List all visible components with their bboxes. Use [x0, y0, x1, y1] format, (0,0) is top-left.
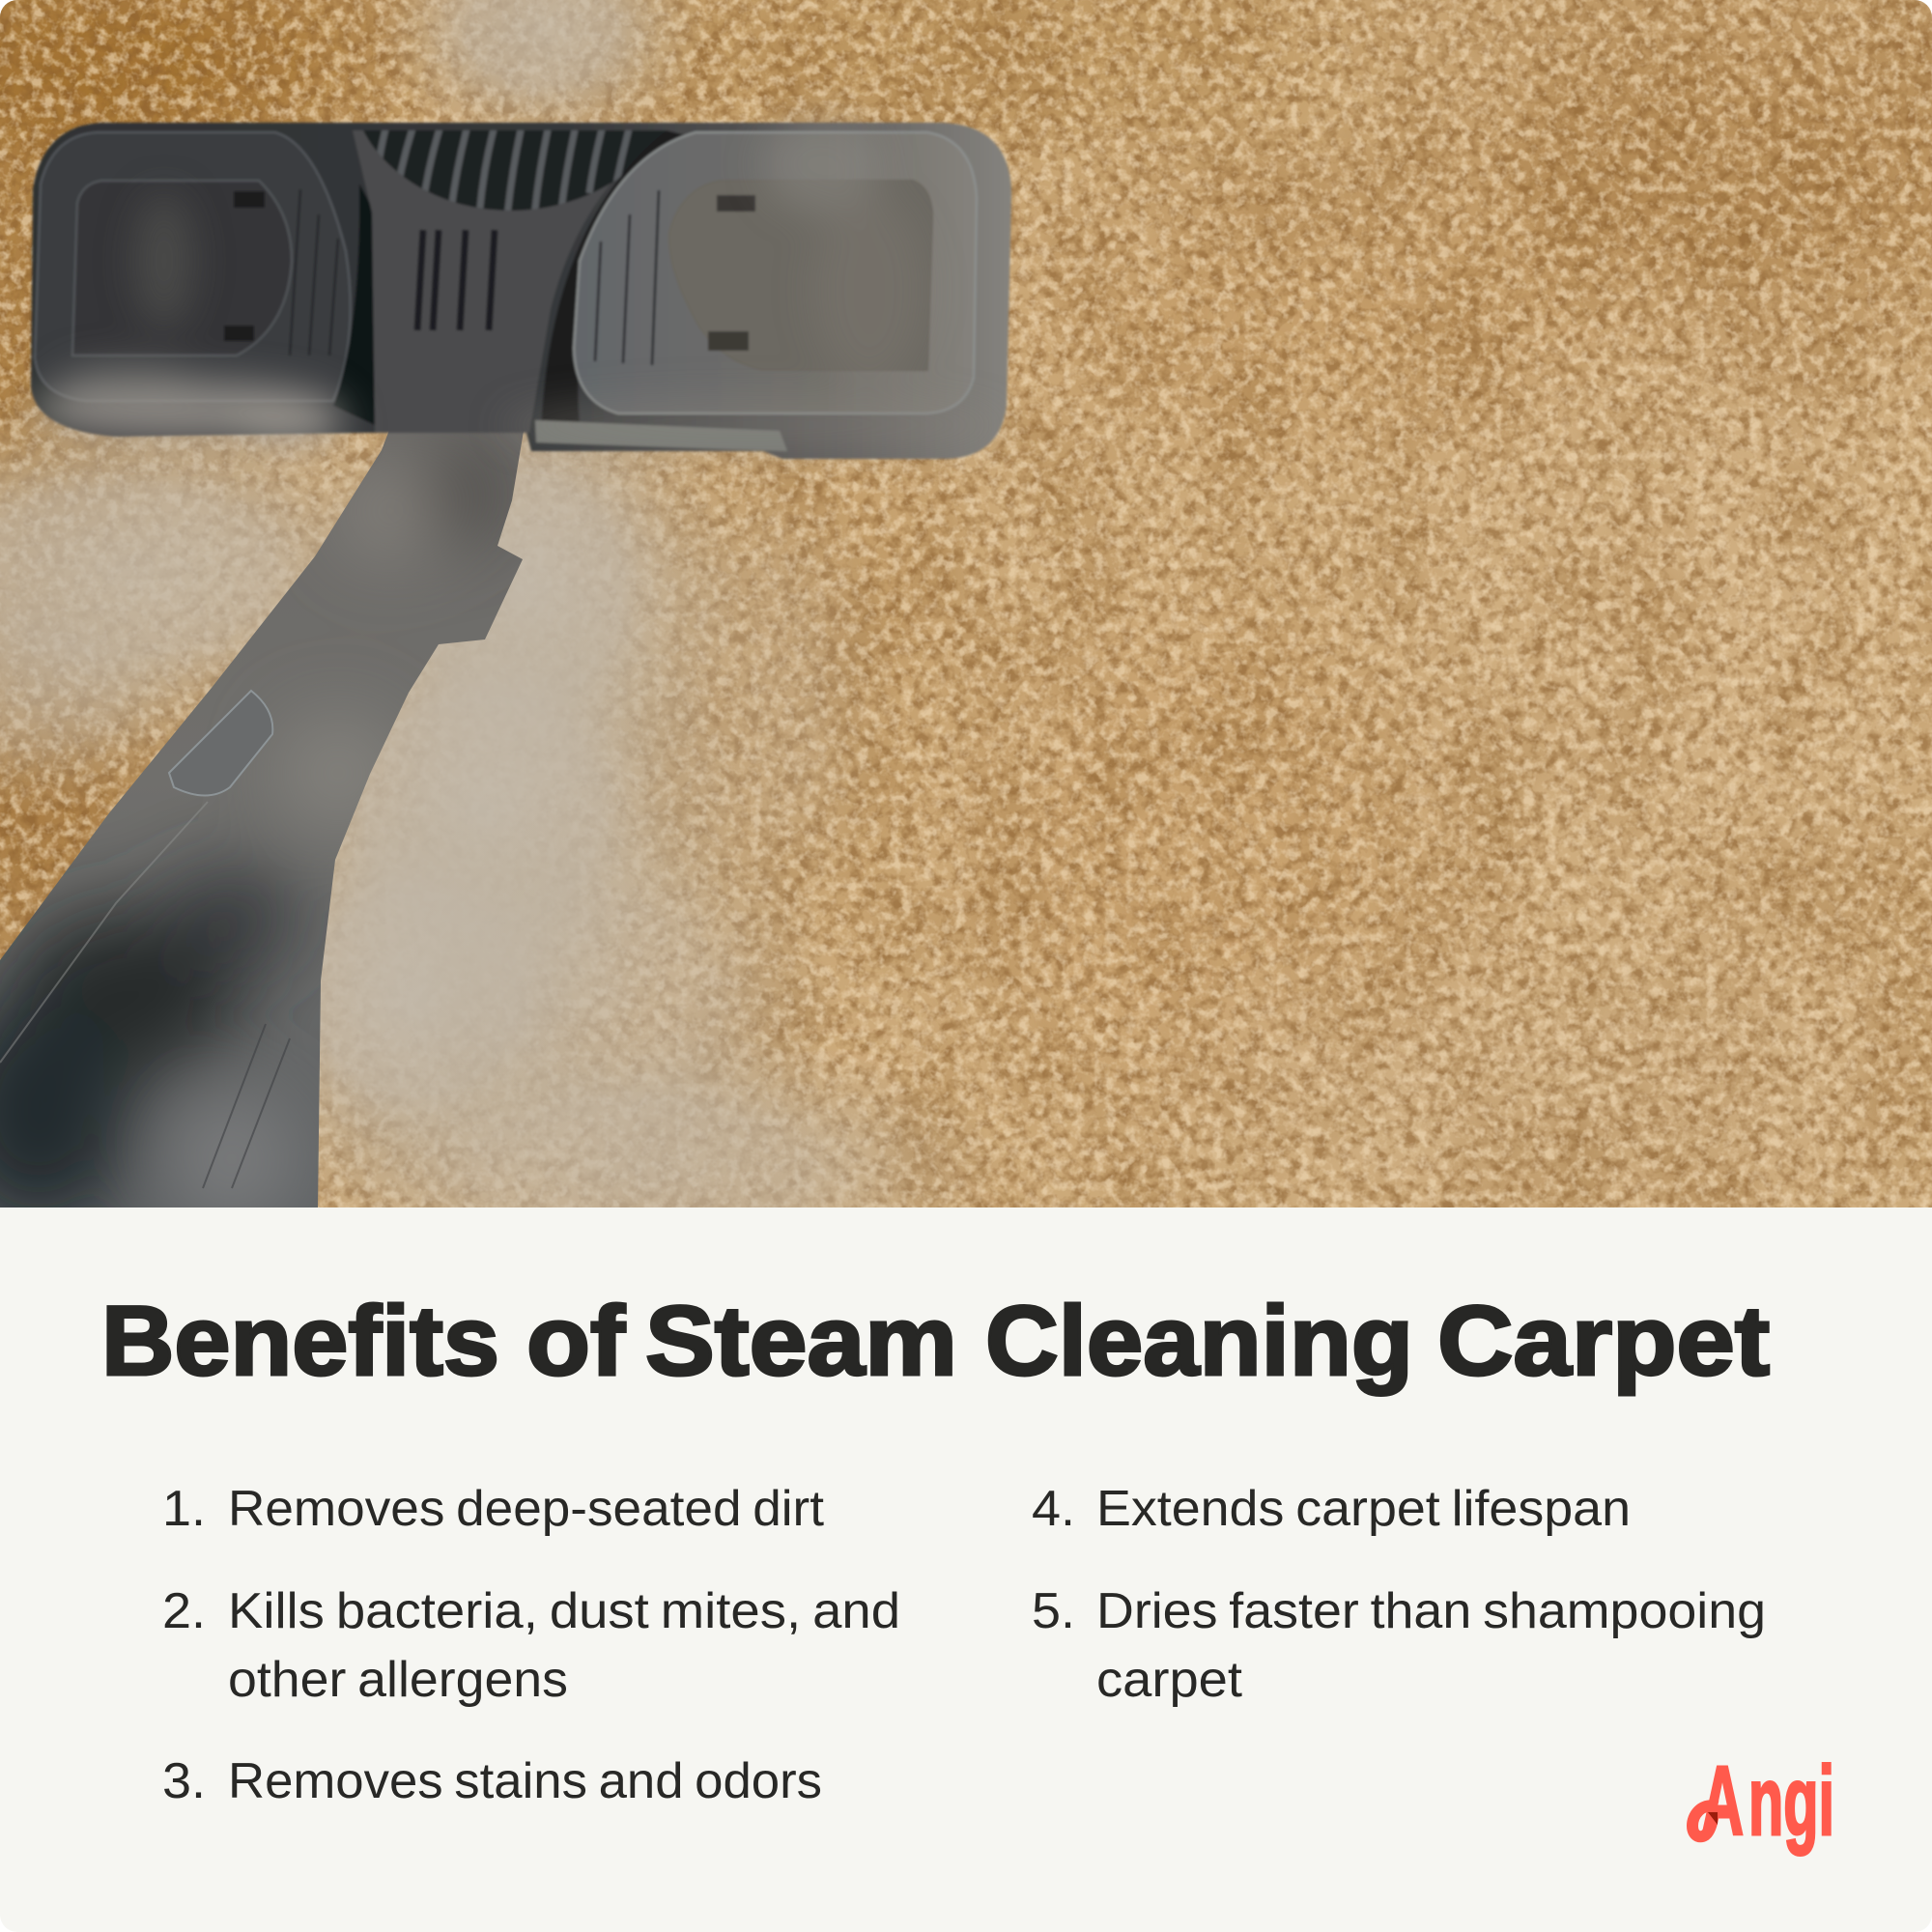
benefit 3: Removes stains and odors [228, 1753, 822, 1809]
Angi logo: ngi [1748, 1747, 1834, 1856]
benefit 5 [1032, 1583, 1766, 1708]
steam cloud on carpet [0, 0, 957, 1208]
benefit 5: 5. [1032, 1583, 1075, 1639]
steamer wand [0, 425, 541, 1227]
center body [353, 130, 667, 433]
Angi logo [1692, 1747, 1834, 1856]
title [101, 1286, 1770, 1396]
benefit 5: carpet [1096, 1652, 1243, 1708]
left foot pad [35, 132, 351, 401]
benefit 1: Removes deep-seated dirt [228, 1481, 825, 1537]
benefit 2: Kills bacteria, dust mites, and [228, 1583, 900, 1639]
title: Steam [645, 1286, 957, 1396]
wand seam [0, 802, 208, 1063]
right pad inset [669, 181, 932, 370]
black gap beside center [333, 184, 375, 425]
benefit 2 [162, 1583, 900, 1708]
bottom bar [535, 420, 787, 451]
steamer head [31, 123, 1011, 459]
title: Benefits [101, 1286, 499, 1396]
Angi logo: A [1701, 1747, 1744, 1856]
center vents [417, 230, 495, 330]
left pad inset [72, 181, 292, 355]
benefit 1: 1. [162, 1481, 206, 1537]
wisps of steam over head [29, 116, 1005, 452]
vent grille [357, 126, 676, 217]
title: Carpet [1437, 1286, 1770, 1396]
benefit 2: other allergens [228, 1652, 568, 1708]
title: Cleaning [985, 1286, 1413, 1396]
benefit 4: Extends carpet lifespan [1096, 1481, 1631, 1537]
wand button [169, 691, 272, 796]
pad slots [224, 191, 755, 351]
benefit 4: 4. [1032, 1481, 1075, 1537]
benefit 3: 3. [162, 1753, 206, 1809]
dark arc [541, 130, 686, 430]
title: of [526, 1286, 626, 1396]
text panel [0, 1208, 1932, 1932]
pad ridges [290, 189, 659, 365]
benefit 2: 2. [162, 1583, 206, 1639]
right foot pad [574, 132, 977, 413]
benefit 5: Dries faster than shampooing [1096, 1583, 1766, 1639]
photo: steam cleaner on carpet [0, 0, 1932, 1314]
head body [31, 123, 1011, 459]
carpet background [0, 0, 1932, 1208]
